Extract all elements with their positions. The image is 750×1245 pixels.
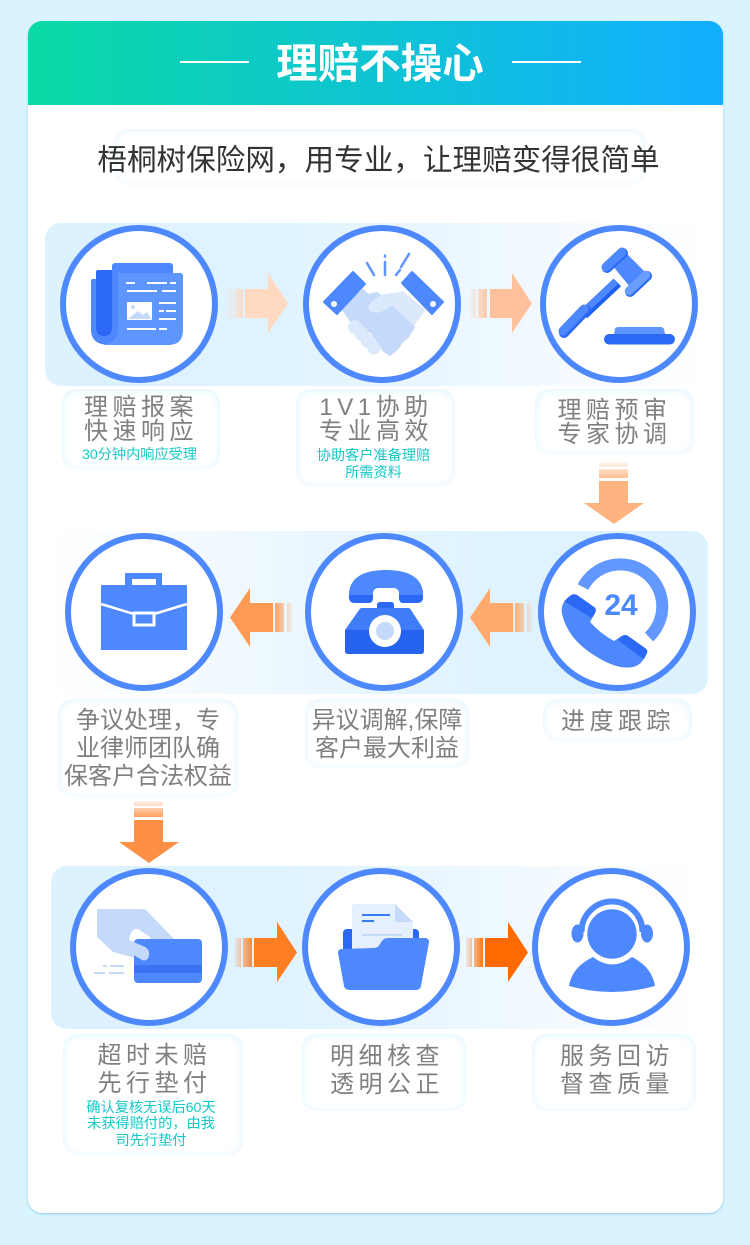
label: report claim [62,389,220,469]
label: progress tracking [543,699,692,741]
icon: newspaper [60,225,218,383]
icon: handshake [303,225,461,383]
icon: 24 hour phone: 24 [604,589,638,622]
label: dispute handling [58,699,238,797]
label: progress tracking: 进度跟踪 [561,708,675,735]
icon: gavel [540,225,698,383]
panel: row 2 band [48,531,708,694]
label: report claim: 快速响应 [84,418,198,445]
note: advance payment terms: 司先行垫付 [116,1132,186,1148]
label: objection mediation [305,699,469,768]
label: service follow-up: 督查质量 [560,1071,674,1098]
label: claim pre-review: 专家协调 [558,421,672,448]
label: service follow-up: 服务回访 [560,1043,674,1070]
label: claim pre-review [535,389,694,454]
subtitle [115,129,645,185]
icon: 24 hour phone [538,533,696,691]
label: advance payment [63,1034,243,1155]
note: prepare documents: 所需资料 [345,464,402,480]
title: 理赔不操心 [276,40,484,87]
label: service follow-up [532,1034,696,1111]
label: transparent details [302,1034,466,1111]
label: transparent details: 透明公正 [330,1071,444,1098]
subtitle text: 梧桐树保险网，用专业，让理赔变得很简单 [97,144,660,177]
icon: customer service agent [532,868,690,1026]
note: advance payment terms [86,1100,216,1148]
label: one to one assistance [296,389,455,486]
label: dispute handling: 争议处理，专 [76,707,220,734]
icon: folder [302,868,460,1026]
label: claim pre-review: 理赔预审 [558,397,672,424]
note: advance payment terms: 未获得赔付的，由我 [87,1116,215,1132]
icon: briefcase [65,533,223,691]
icon: hand with card [70,868,228,1026]
panel: row 1 band [45,223,705,386]
note: advance payment terms: 确认复核无误后60天 [86,1100,216,1116]
note: prepare documents: 协助客户准备理赔 [317,448,430,464]
label: transparent details: 明细核查 [330,1043,444,1070]
label: objection mediation: 客户最大利益 [315,735,459,762]
label: advance payment: 先行垫付 [98,1070,212,1097]
note: response time: 30分钟内响应受理 [82,447,197,463]
note: prepare documents [317,448,430,480]
label: dispute handling: 保客户合法权益 [64,763,232,790]
label: one to one assistance: 专业高效 [319,418,433,445]
label: advance payment: 超时未赔 [98,1042,212,1069]
label: one to one assistance: 1V1协助 [319,394,433,421]
label: report claim: 理赔报案 [84,394,198,421]
panel: row 3 band [51,866,701,1029]
label: objection mediation: 异议调解,保障 [312,707,462,734]
header banner [28,21,723,105]
icon: telephone [305,533,463,691]
label: dispute handling: 业律师团队确 [76,735,220,762]
